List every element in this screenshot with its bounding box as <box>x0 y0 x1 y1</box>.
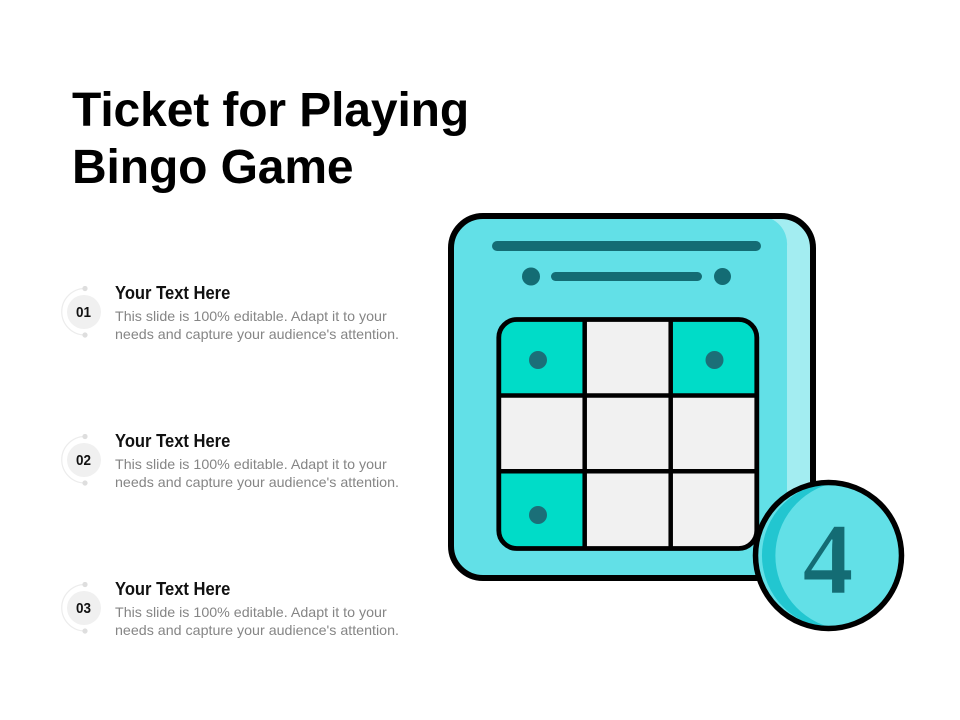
title: Ticket for Playing <box>72 84 469 137</box>
number badge 03: 03 <box>76 600 91 617</box>
item heading: Your Text Here <box>115 283 230 303</box>
item body <box>115 457 399 491</box>
item body: needs and capture your audience's attention. <box>115 475 399 491</box>
number badge 03 <box>61 582 101 634</box>
marked cells <box>499 320 757 548</box>
grid lines <box>498 319 757 549</box>
chip dots <box>529 351 724 524</box>
item body: needs and capture your audience's attention. <box>115 327 399 343</box>
number badge 01 <box>61 286 101 338</box>
number badge 01: 01 <box>76 304 91 321</box>
bingo ball with number 4 <box>756 482 902 629</box>
item body <box>115 309 399 343</box>
item body: This slide is 100% editable. Adapt it to your <box>115 309 387 325</box>
item heading: Your Text Here <box>115 579 230 599</box>
list item 01 <box>61 283 399 343</box>
list item 02 <box>61 431 399 491</box>
item body <box>115 605 399 639</box>
item body: needs and capture your audience's attention. <box>115 623 399 639</box>
item body: This slide is 100% editable. Adapt it to your <box>115 605 387 621</box>
item body: This slide is 100% editable. Adapt it to your <box>115 457 387 473</box>
ticket card <box>451 216 813 578</box>
bingo grid <box>498 319 757 549</box>
ticket header bars and dots <box>492 241 761 286</box>
title <box>72 84 469 194</box>
title: Bingo Game <box>72 141 354 194</box>
item heading: Your Text Here <box>115 431 230 451</box>
number badge 02 <box>61 434 101 486</box>
number 4: 4 <box>802 503 854 616</box>
list item 03 <box>61 579 399 639</box>
number badge 02: 02 <box>76 452 91 469</box>
